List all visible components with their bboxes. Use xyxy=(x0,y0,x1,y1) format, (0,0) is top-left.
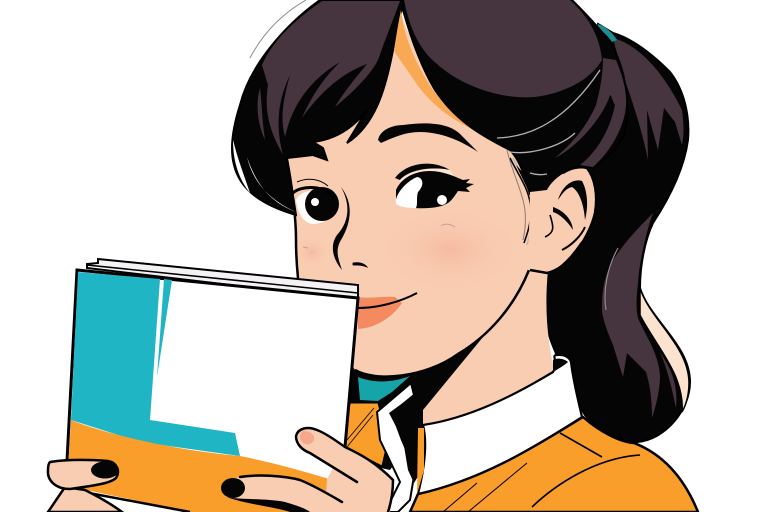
left eye lid crease xyxy=(297,179,328,186)
grey highlight lines xyxy=(497,70,600,175)
orange hair strand xyxy=(394,10,480,133)
ponytail cream edge xyxy=(640,288,689,412)
finger outlines xyxy=(240,428,393,512)
magazine xyxy=(66,259,358,512)
orange sweater body xyxy=(410,417,698,512)
ponytail lit upper area xyxy=(613,38,684,160)
lower finger xyxy=(48,487,122,512)
cover bottom edge xyxy=(73,490,190,512)
lit hair area left xyxy=(262,1,400,155)
ponytail highlight line xyxy=(605,248,618,310)
blush on cheek xyxy=(378,206,522,294)
lit hair strip by the ear xyxy=(555,58,626,167)
thin lit strand left xyxy=(258,88,265,140)
cover xyxy=(66,270,358,512)
right eyebrow xyxy=(378,123,478,152)
ponytail outer strand xyxy=(660,352,676,408)
nose xyxy=(333,187,367,270)
cover teal block xyxy=(71,272,240,456)
white collar, left zigzag xyxy=(377,383,424,512)
black finger nail xyxy=(221,478,245,498)
blush on nose side xyxy=(294,236,330,268)
side hair strands in front of the face xyxy=(507,150,534,245)
orange sweater, left shoulder panel xyxy=(345,403,388,466)
index finger nail xyxy=(300,431,314,444)
ear xyxy=(528,167,596,273)
mouth xyxy=(358,293,417,329)
lit hair area right xyxy=(404,0,602,97)
cover teal sliver xyxy=(157,279,172,377)
left hand xyxy=(48,460,122,512)
face xyxy=(287,10,560,377)
neck xyxy=(423,270,555,425)
jaw line xyxy=(287,160,529,377)
lower finger thick shadow xyxy=(226,497,310,512)
left hair and fringe xyxy=(232,0,404,215)
white hair highlights xyxy=(233,140,296,212)
ponytail xyxy=(545,24,690,442)
ponytail lit lower area xyxy=(602,213,660,418)
right hand xyxy=(221,428,393,512)
right hair mass xyxy=(403,0,627,194)
right eye xyxy=(395,164,474,208)
right eye lid crease xyxy=(395,164,450,180)
teal undershirt and dark shadow below the chin xyxy=(345,325,497,470)
stray hair line xyxy=(250,0,306,58)
left eye xyxy=(293,179,339,224)
white collar, right side xyxy=(418,355,582,494)
thumb xyxy=(48,460,118,489)
thumb nail xyxy=(91,462,119,478)
teal hair tie xyxy=(596,24,617,42)
back pages xyxy=(87,259,358,300)
ear inner folds xyxy=(553,180,587,230)
cover orange band xyxy=(67,420,329,512)
skin mark and freckle xyxy=(303,224,455,248)
